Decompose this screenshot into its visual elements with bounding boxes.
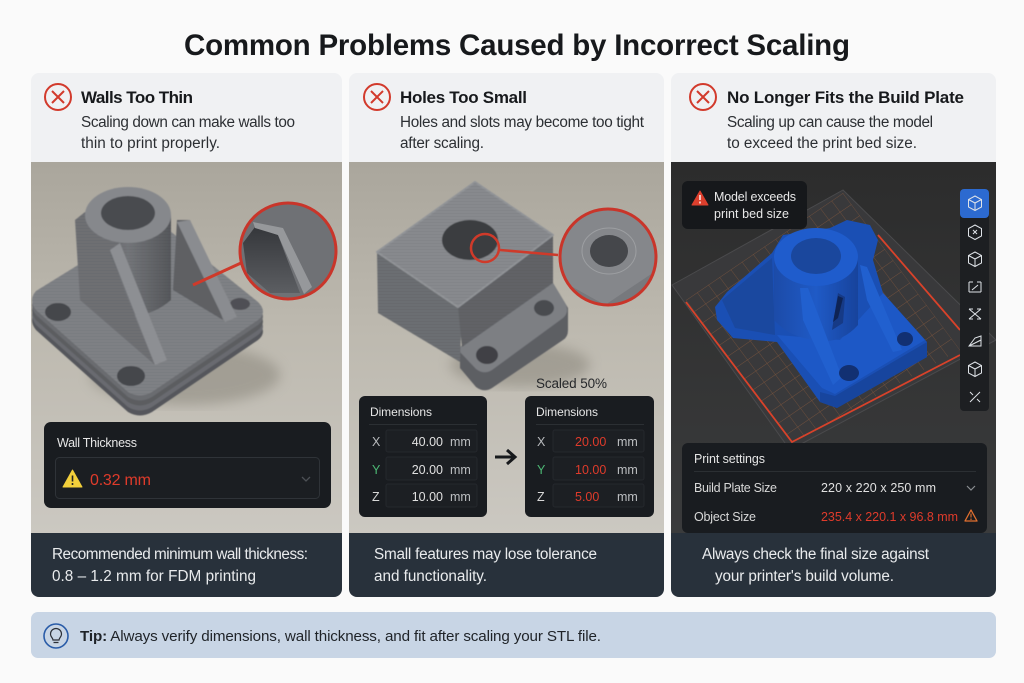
dimensions panel: original: 10.00 xyxy=(412,490,443,504)
heading: holes too small: Holes Too Small xyxy=(400,88,527,107)
footer note: Always check the final size against xyxy=(702,546,930,563)
dimensions panel: original: Z xyxy=(372,490,380,504)
label: Wall Thickness xyxy=(57,436,137,450)
icon: red x circle xyxy=(364,84,390,110)
footer note: 0.8 – 1.2 mm for FDM printing xyxy=(52,568,256,585)
print settings panel: Print settings xyxy=(694,452,765,466)
value: 0.32 mm xyxy=(90,472,151,489)
bed boundary xyxy=(686,235,960,442)
callout line xyxy=(193,263,241,285)
tip text: Tip: Always verify dimensions, wall thickness, and fit after scaling your STL file. xyxy=(80,628,601,645)
description: after scaling. xyxy=(400,135,484,152)
label: scaled 50%: Scaled 50% xyxy=(536,376,607,391)
panel: holes too small xyxy=(349,73,664,597)
dimensions panel: original: Y xyxy=(372,463,381,477)
dimensions panel: original: Dimensions xyxy=(370,405,432,419)
dimensions panel: original: 40.00 xyxy=(412,435,443,449)
slicer view: oversize blue model on build plate xyxy=(671,162,996,533)
description: to exceed the print bed size. xyxy=(727,135,917,152)
panel: walls too thin xyxy=(31,73,342,597)
description xyxy=(81,114,295,152)
dimensions panel: original: mm xyxy=(450,463,471,477)
description: Holes and slots may become too tight xyxy=(400,114,645,131)
dimensions panel: original xyxy=(359,396,487,517)
arrow xyxy=(495,450,515,464)
heading: no longer fits: No Longer Fits the Build Plate xyxy=(727,88,964,107)
footer note: Recommended minimum wall thickness: xyxy=(52,546,308,563)
dimensions panel: scaled: Z xyxy=(537,490,545,504)
footer note xyxy=(671,533,996,597)
icon: red x circle xyxy=(690,84,716,110)
description: Scaling down can make walls too xyxy=(81,114,295,131)
print settings panel xyxy=(682,443,987,533)
wall thickness panel xyxy=(44,422,331,508)
dimensions panel: scaled: mm xyxy=(617,490,638,504)
print settings panel: Build Plate Size xyxy=(694,481,777,495)
icon: lightbulb xyxy=(44,624,68,648)
panel: no longer fits the build plate xyxy=(671,73,996,597)
dimensions panel: original: 20.00 xyxy=(412,463,443,477)
description xyxy=(727,114,933,152)
footer note: and functionality. xyxy=(374,568,487,585)
dimensions panel: original: mm xyxy=(450,435,471,449)
photo: grey printed bracket xyxy=(31,162,342,533)
callout marker xyxy=(471,234,558,262)
dimensions panel: scaled: mm xyxy=(617,435,638,449)
footer note xyxy=(31,533,342,597)
icon: warning xyxy=(63,470,82,487)
title: Common Problems Caused by Incorrect Scaling xyxy=(184,29,850,62)
photo: grey printed block xyxy=(349,162,664,533)
dimensions panel: original: X xyxy=(372,435,381,449)
warning tooltip xyxy=(682,181,807,229)
callout: magnified thin wall xyxy=(240,203,336,299)
dimensions panel: scaled: X xyxy=(537,435,546,449)
warning tooltip: Model exceeds xyxy=(714,190,796,204)
icon: warning xyxy=(692,191,708,205)
blue model xyxy=(715,220,927,408)
print settings panel: Object Size xyxy=(694,510,756,524)
view toolbar xyxy=(960,189,989,411)
description: Scaling up can cause the model xyxy=(727,114,933,131)
warning tooltip: print bed size xyxy=(714,207,789,221)
dimensions panel: scaled: mm xyxy=(617,463,638,477)
dimensions panel: scaled: 5.00 xyxy=(575,490,599,504)
description: thin to print properly. xyxy=(81,135,220,152)
print settings panel: 235.4 x 220.1 x 96.8 mm xyxy=(821,510,958,524)
footer note xyxy=(349,533,664,597)
footer note: your printer's build volume. xyxy=(715,568,894,585)
icon: red x circle xyxy=(45,84,71,110)
dimensions panel: scaled: 10.00 xyxy=(575,463,606,477)
description xyxy=(400,114,645,152)
footer note: Small features may lose tolerance xyxy=(374,546,597,563)
icon: warning outline xyxy=(965,510,977,521)
heading: walls too thin: Walls Too Thin xyxy=(81,88,193,107)
callout: magnified hole xyxy=(558,208,658,306)
dimensions panel: scaled xyxy=(525,396,654,517)
tip bar xyxy=(31,612,996,658)
dimensions panel: scaled: 20.00 xyxy=(575,435,606,449)
print settings panel: 220 x 220 x 250 mm xyxy=(821,481,936,495)
dimensions panel: original: mm xyxy=(450,490,471,504)
dimensions panel: scaled: Y xyxy=(537,463,546,477)
dimensions panel: scaled: Dimensions xyxy=(536,405,598,419)
